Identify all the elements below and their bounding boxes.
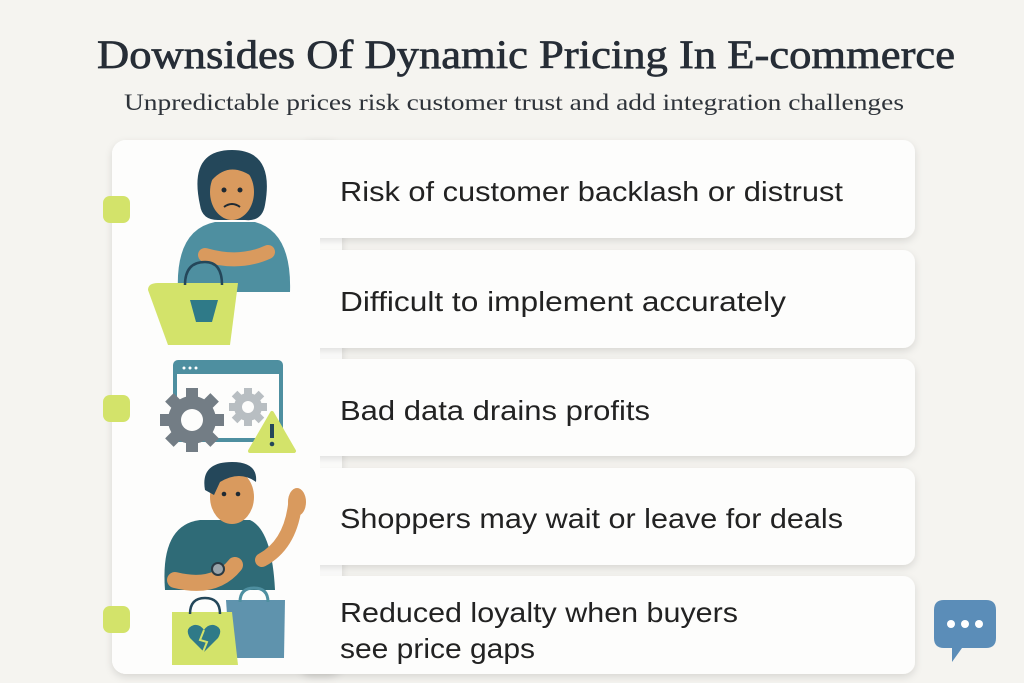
icon: frustrated woman with basket bag	[148, 150, 290, 345]
panel: list of downsides	[112, 140, 915, 674]
bullet markers	[103, 196, 130, 633]
icon: chat bubble	[934, 600, 996, 662]
card 1: Risk of customer backlash or distrust	[340, 176, 843, 207]
cover left panel over cards	[112, 140, 320, 674]
card 4	[300, 468, 915, 565]
icon: gears with browser window and warning	[160, 362, 294, 452]
card 5	[300, 576, 915, 674]
card 3	[300, 359, 915, 456]
icon: man waving with bags	[164, 462, 306, 665]
card 5: Reduced loyalty when buyers	[340, 597, 738, 628]
subtitle: Unpredictable prices risk customer trust and add integration challenges	[124, 90, 904, 115]
card 3: Bad data drains profits	[340, 395, 650, 426]
card 4: Shoppers may wait or leave for deals	[340, 503, 843, 534]
card 2	[300, 250, 915, 348]
left illustration panel	[112, 140, 342, 674]
card 5: see price gaps	[340, 633, 535, 664]
card 2: Difficult to implement accurately	[340, 286, 786, 317]
title: Downsides Of Dynamic Pricing In E-commerce	[97, 32, 955, 77]
card 1	[300, 140, 915, 238]
